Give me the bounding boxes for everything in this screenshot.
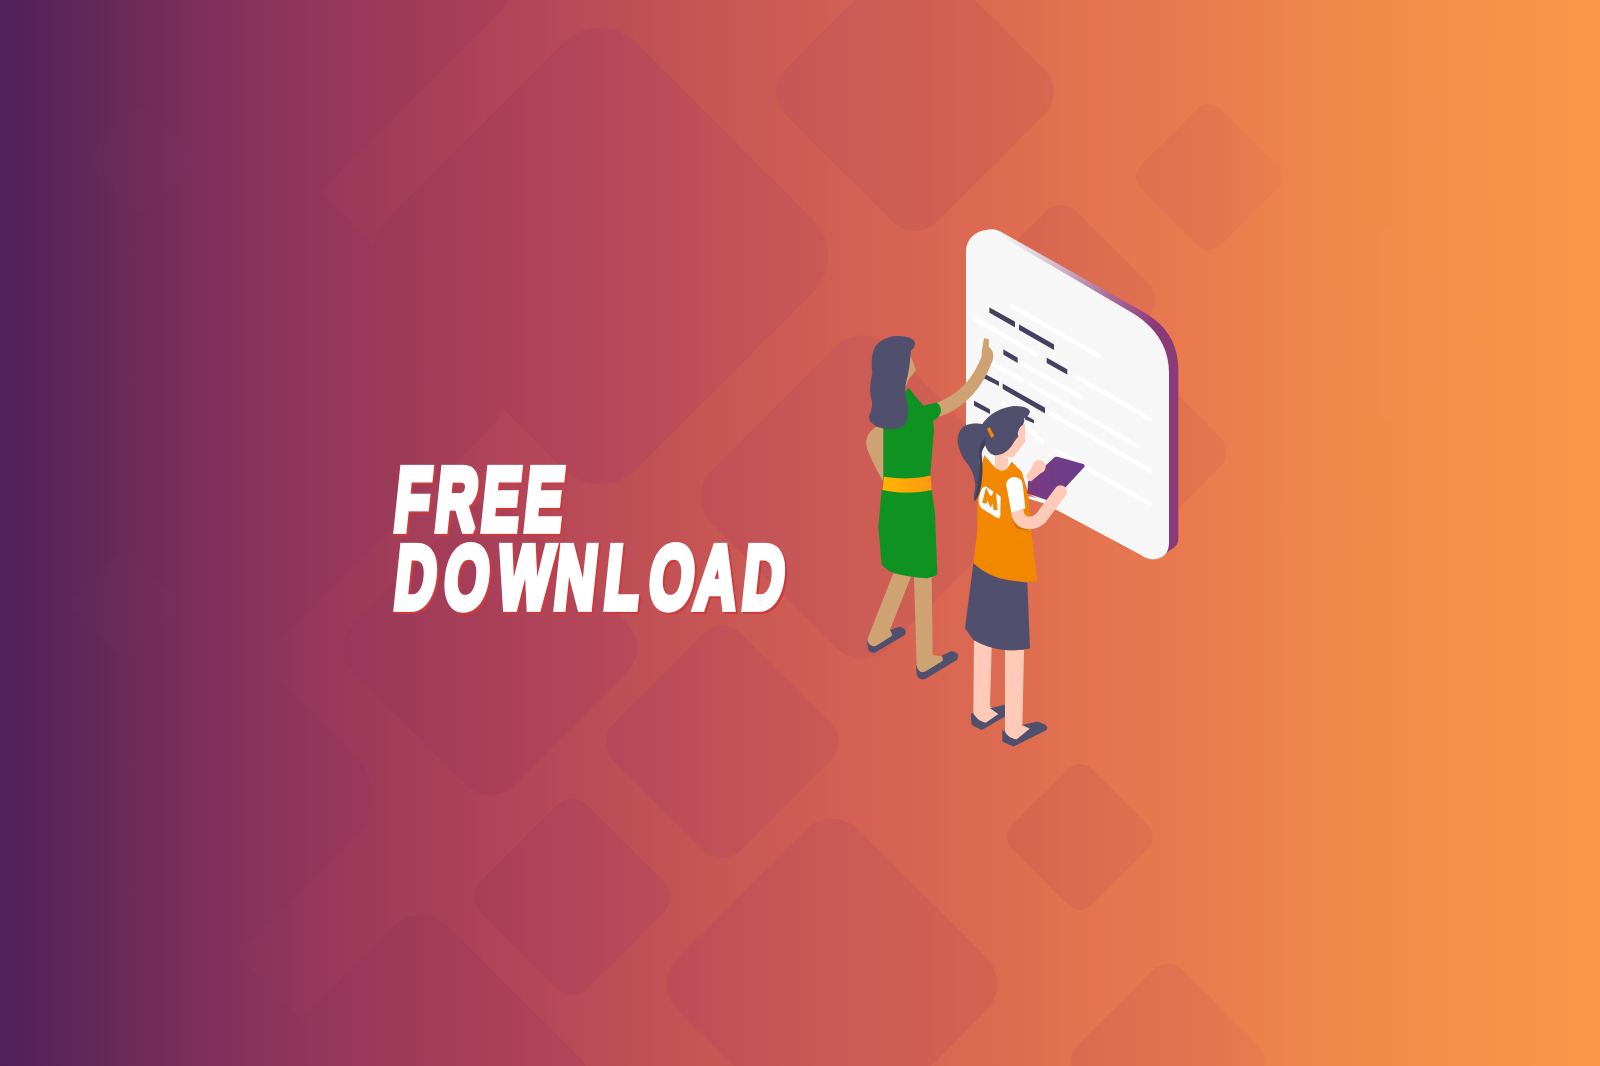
title line: FREE: FREE [390,449,569,549]
ponytail shadow [974,436,990,502]
title: FREE DOWNLOAD [390,449,790,627]
shirt logo badge [979,487,1001,518]
document white text lines [974,305,1152,505]
document page [966,230,1169,559]
neck [995,453,1008,472]
back shoe [867,627,906,653]
ponytail [958,423,988,501]
far hand [1026,460,1046,482]
green dress top [883,388,941,481]
illustration: two women reading a document [866,229,1178,747]
face [1000,423,1025,457]
title line: DOWNLOAD: DOWNLOAD [390,527,790,627]
background pattern: faint light diamonds [68,37,1570,662]
raised arm [933,338,993,417]
document side edge [982,229,1178,558]
tablet edge [1029,496,1046,503]
front leg [914,577,943,672]
back shoe [971,705,1005,730]
front shoe [916,651,958,679]
green skirt [878,490,937,578]
back arm [866,427,885,482]
tablet body [1027,457,1085,501]
arm shadow [1012,518,1028,531]
near arm [1017,492,1061,523]
skirt [965,563,1030,650]
hair tie [987,427,994,438]
woman in green dress [866,336,993,679]
sleeve [1006,477,1025,512]
front leg [1005,650,1032,739]
document dark text lines [974,307,1067,423]
hair [869,336,915,429]
orange shirt [973,455,1037,582]
woman in orange shirt [958,406,1085,747]
belt [883,476,932,493]
face [897,350,916,393]
back leg [973,638,999,723]
back leg [868,573,911,646]
hair [982,406,1030,455]
tablet [1027,457,1085,503]
front shoe [1002,722,1047,747]
document panel [966,229,1178,559]
